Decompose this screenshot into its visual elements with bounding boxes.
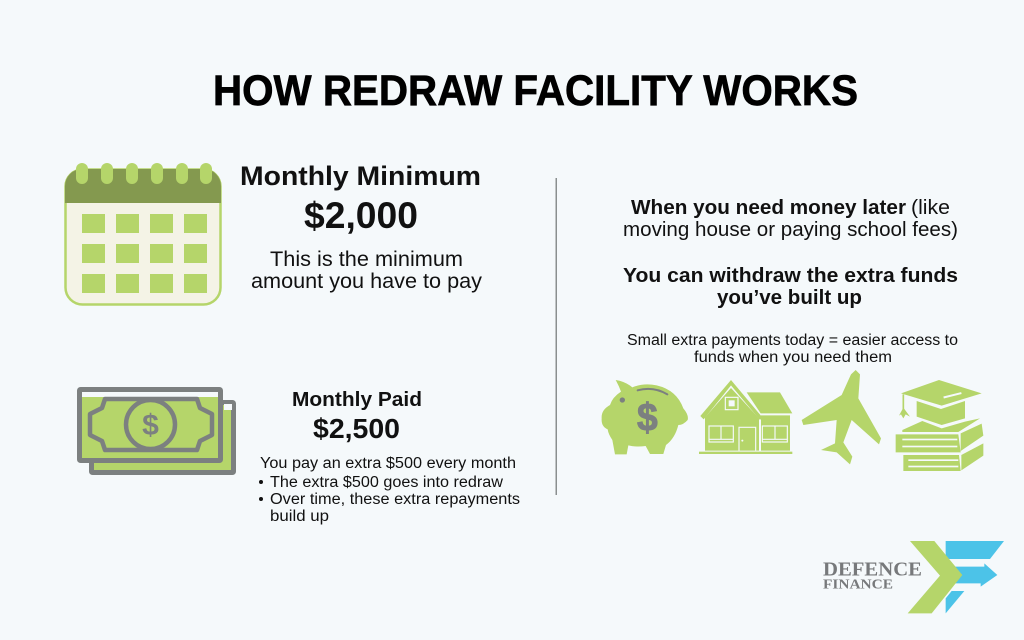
logo: Defence Finance: DEFENCE [823,558,922,580]
text block: monthly minimum: $2,000 [304,195,418,236]
text block: small extra payments: funds when you need them [694,349,892,366]
icon: piggy bank: $ [637,396,658,440]
text block: monthly minimum: amount you have to pay [251,270,483,293]
text block: when you need money later: (like [911,197,950,219]
text block: monthly minimum [240,161,483,293]
text block: small extra payments [627,332,958,366]
text block: monthly paid [259,389,520,525]
icon: house [699,380,792,454]
icon: books and graduation cap [896,380,983,471]
text block: monthly paid: You pay an extra $500 every month [260,455,516,472]
text block: monthly paid: $2,500 [313,413,400,444]
icon: piggy bank [602,380,688,454]
text block: small extra payments: Small extra payments today = easier access to [627,332,958,349]
logo: Defence Finance: FINANCE [823,578,893,592]
text block: monthly paid: build up [270,508,329,525]
icon: banknotes: $ [142,409,159,442]
icon: airplane [802,370,881,464]
text block: withdraw extra funds [623,265,958,309]
title: HOW REDRAW FACILITY WORKS [213,67,858,115]
icon: banknotes [80,390,234,472]
text block: when you need money later [623,197,958,241]
text block: when you need money later: When you need money later [631,197,906,219]
logo: Defence Finance [823,541,1004,613]
text block: monthly paid: The extra $500 goes into redraw [270,474,504,491]
text block: monthly minimum: This is the minimum [270,248,463,271]
text block: monthly paid: Over time, these extra repayments [270,491,520,508]
text block: monthly paid: Monthly Paid [292,389,422,411]
text block: withdraw extra funds: you’ve built up [717,287,862,309]
text block: monthly minimum: Monthly Minimum [240,161,481,191]
text block: withdraw extra funds: You can withdraw the extra funds [623,265,958,287]
icon: calendar [65,163,221,304]
text block: when you need money later: moving house or paying school fees) [623,219,958,241]
